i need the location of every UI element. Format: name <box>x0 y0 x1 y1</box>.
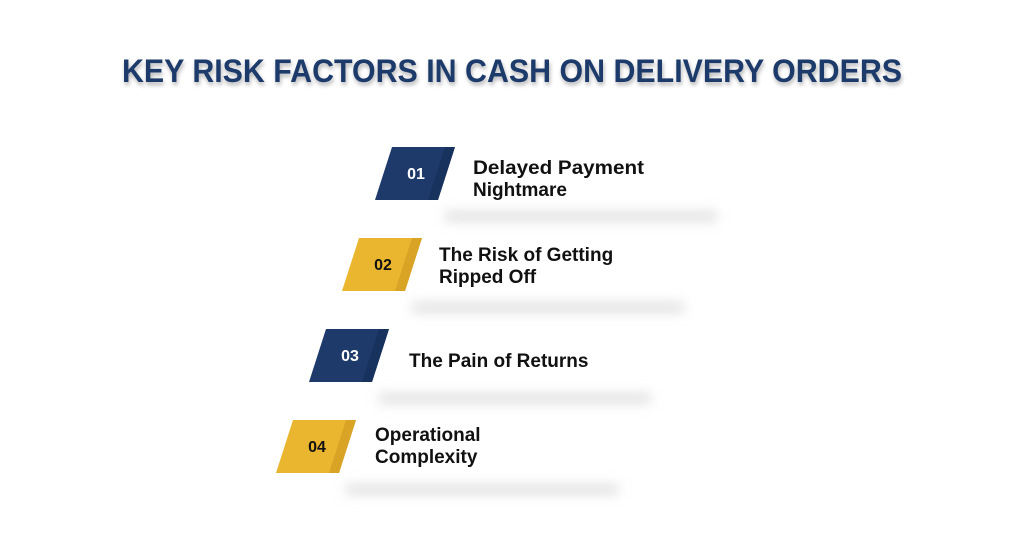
item 03: The Pain of Returns <box>409 351 588 372</box>
item 03: 03 <box>341 348 359 365</box>
title: KEY RISK FACTORS IN CASH ON DELIVERY ORDERS <box>122 53 902 89</box>
item 01 <box>375 147 717 221</box>
item 02: 02 <box>374 257 392 274</box>
item 02: The Risk of Getting <box>439 245 613 266</box>
item 01: Nightmare <box>473 180 567 201</box>
item 02: Ripped Off <box>439 267 537 288</box>
item 04: Complexity <box>375 447 478 468</box>
item 03 <box>309 329 651 403</box>
item 04: Operational <box>375 425 481 446</box>
item 01: Delayed Payment <box>473 158 645 179</box>
item 01: 01 <box>407 166 425 183</box>
item 04: 04 <box>308 439 326 456</box>
item 02 <box>342 238 684 312</box>
item 04 <box>276 420 618 494</box>
